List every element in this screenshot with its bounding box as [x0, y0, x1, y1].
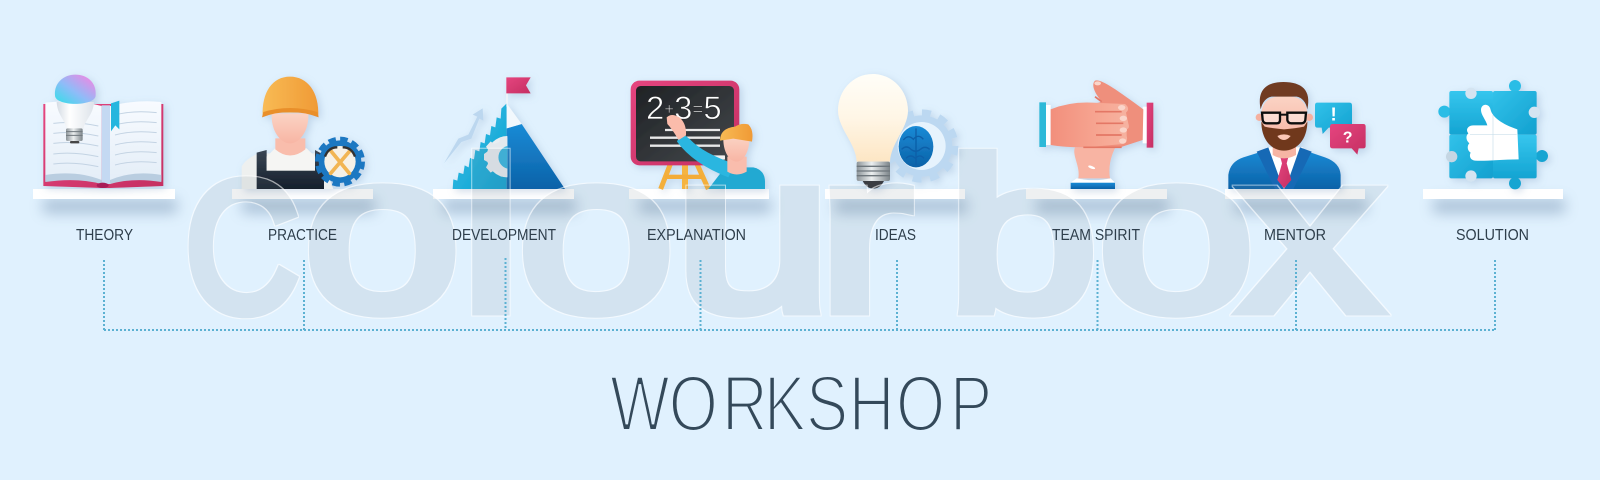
watermark: C — [185, 145, 299, 351]
icon: construction worker with gear (practice) — [242, 77, 362, 189]
label: practice: PRACTICE — [268, 227, 337, 244]
label: theory: THEORY — [76, 227, 133, 244]
label: solution: SOLUTION — [1456, 227, 1529, 244]
icon: book and light bulb (theory) — [43, 75, 163, 188]
watermark: o — [1098, 106, 1254, 358]
watermark: b — [948, 116, 1097, 356]
watermark: o — [518, 106, 674, 358]
watermark: r — [818, 106, 912, 358]
text: bubble marks: ? — [1343, 129, 1353, 146]
icon: light bulb with brain gear (ideas) — [838, 74, 954, 189]
text: chalk sum: 5 — [703, 89, 722, 126]
label: ideas: IDEAS — [875, 227, 916, 244]
shelves row — [33, 189, 1565, 213]
icon: puzzle with thumbs up (solution) — [1438, 80, 1548, 189]
icon: stacked hands (team spirit) — [1039, 80, 1153, 189]
watermark: x — [1240, 106, 1381, 358]
dotted connector bracket — [104, 258, 1495, 330]
watermark: l — [461, 116, 521, 356]
title: WORKSHOP — [610, 360, 992, 448]
watermark — [185, 106, 1381, 358]
text: chalk sum: 2 — [646, 89, 664, 126]
watermark: u — [675, 106, 831, 358]
labels — [76, 227, 1529, 244]
label: explanation: EXPLANATION — [647, 227, 746, 244]
text: chalk sum: + — [664, 99, 674, 118]
label: development: DEVELOPMENT — [452, 227, 556, 244]
text: chalk sum: 3 — [674, 89, 692, 126]
watermark: o — [304, 106, 460, 358]
label: mentor: MENTOR — [1264, 227, 1326, 244]
label: team spirit: TEAM SPIRIT — [1052, 227, 1140, 244]
text: bubble marks: ! — [1331, 104, 1337, 125]
text: chalk sum: = — [692, 98, 703, 119]
icon: mountain with flag, gear and arrow (development) — [444, 77, 565, 189]
icon: teacher at chalkboard (explanation) — [631, 81, 765, 189]
icon: bearded mentor with speech bubbles — [1228, 82, 1366, 189]
